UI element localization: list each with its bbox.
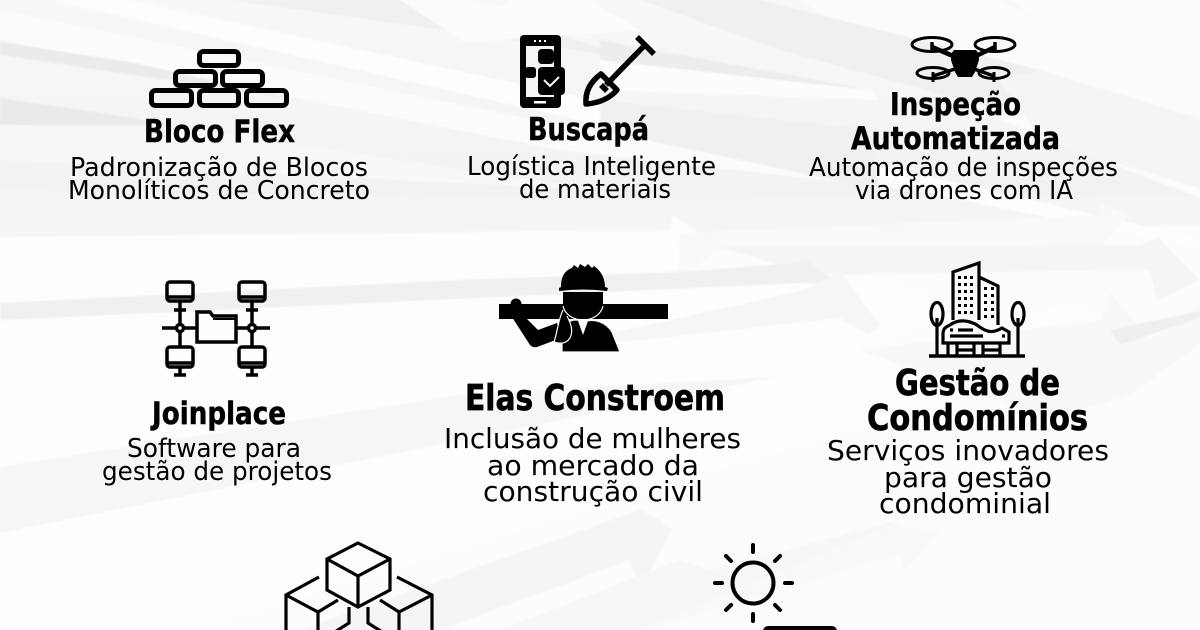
title: Gestão de Condomínios: Condomínios bbox=[867, 398, 1088, 439]
text: Bloco Flex description: Padronização de Blocos bbox=[70, 153, 368, 183]
text: Buscapá description bbox=[467, 152, 716, 205]
text: Joinplace description: gestão de projetos bbox=[102, 457, 332, 487]
title: Gestão de Condomínios: Gestão de bbox=[895, 363, 1060, 404]
icon: phone app bbox=[520, 35, 565, 108]
icon: cubes bbox=[286, 543, 432, 630]
text: Elas Constroem description bbox=[444, 422, 741, 508]
text: Gestão de Condomínios description bbox=[827, 434, 1109, 520]
title: Inspeção Automatizada bbox=[851, 87, 1060, 157]
text: Inspeção description: via drones com IA bbox=[855, 176, 1073, 206]
text: Elas Constroem description: ao mercado da bbox=[487, 449, 699, 482]
title: Gestão de Condomínios bbox=[867, 363, 1088, 439]
text: Bloco Flex description: Monolíticos de Concreto bbox=[68, 176, 370, 206]
item: Buscapá bbox=[520, 35, 654, 108]
title: Joinplace: Joinplace bbox=[150, 396, 286, 432]
text: Elas Constroem description: construção civil bbox=[483, 475, 703, 508]
icon: bricks bbox=[152, 52, 286, 106]
icon: drone bbox=[912, 38, 1015, 82]
icon: condominium buildings bbox=[929, 263, 1025, 356]
text: Gestão de Condomínios description: para gestão bbox=[884, 461, 1052, 494]
icon: network with folder bbox=[162, 282, 270, 375]
text: Bloco Flex description bbox=[68, 153, 370, 206]
text: Gestão de Condomínios description: Serviços inovadores bbox=[827, 434, 1109, 467]
text: Elas Constroem description: Inclusão de mulheres bbox=[444, 422, 741, 455]
title: Buscapá: Buscapá bbox=[528, 112, 649, 148]
title: Elas Constroem: Elas Constroem bbox=[465, 378, 725, 419]
text: Gestão de Condomínios description: condominial bbox=[879, 487, 1051, 520]
text: Inspeção description: Automação de inspeções bbox=[809, 153, 1118, 183]
text: Inspeção description bbox=[809, 153, 1118, 206]
title: Inspeção Automatizada: Automatizada bbox=[851, 121, 1060, 157]
text: Joinplace description: Software para bbox=[127, 434, 301, 464]
title: Bloco Flex: Bloco Flex bbox=[144, 114, 295, 150]
title: Inspeção Automatizada: Inspeção bbox=[890, 87, 1021, 123]
item: Bloco Flex bbox=[68, 52, 370, 206]
icon: shovel bbox=[586, 37, 654, 104]
icon: sun with panel bbox=[715, 545, 837, 630]
text: Buscapá description: de materiais bbox=[519, 175, 671, 205]
icon: woman worker carrying beam bbox=[499, 264, 668, 352]
text: Buscapá description: Logística Inteligente bbox=[467, 152, 716, 182]
text: Joinplace description bbox=[102, 434, 332, 487]
